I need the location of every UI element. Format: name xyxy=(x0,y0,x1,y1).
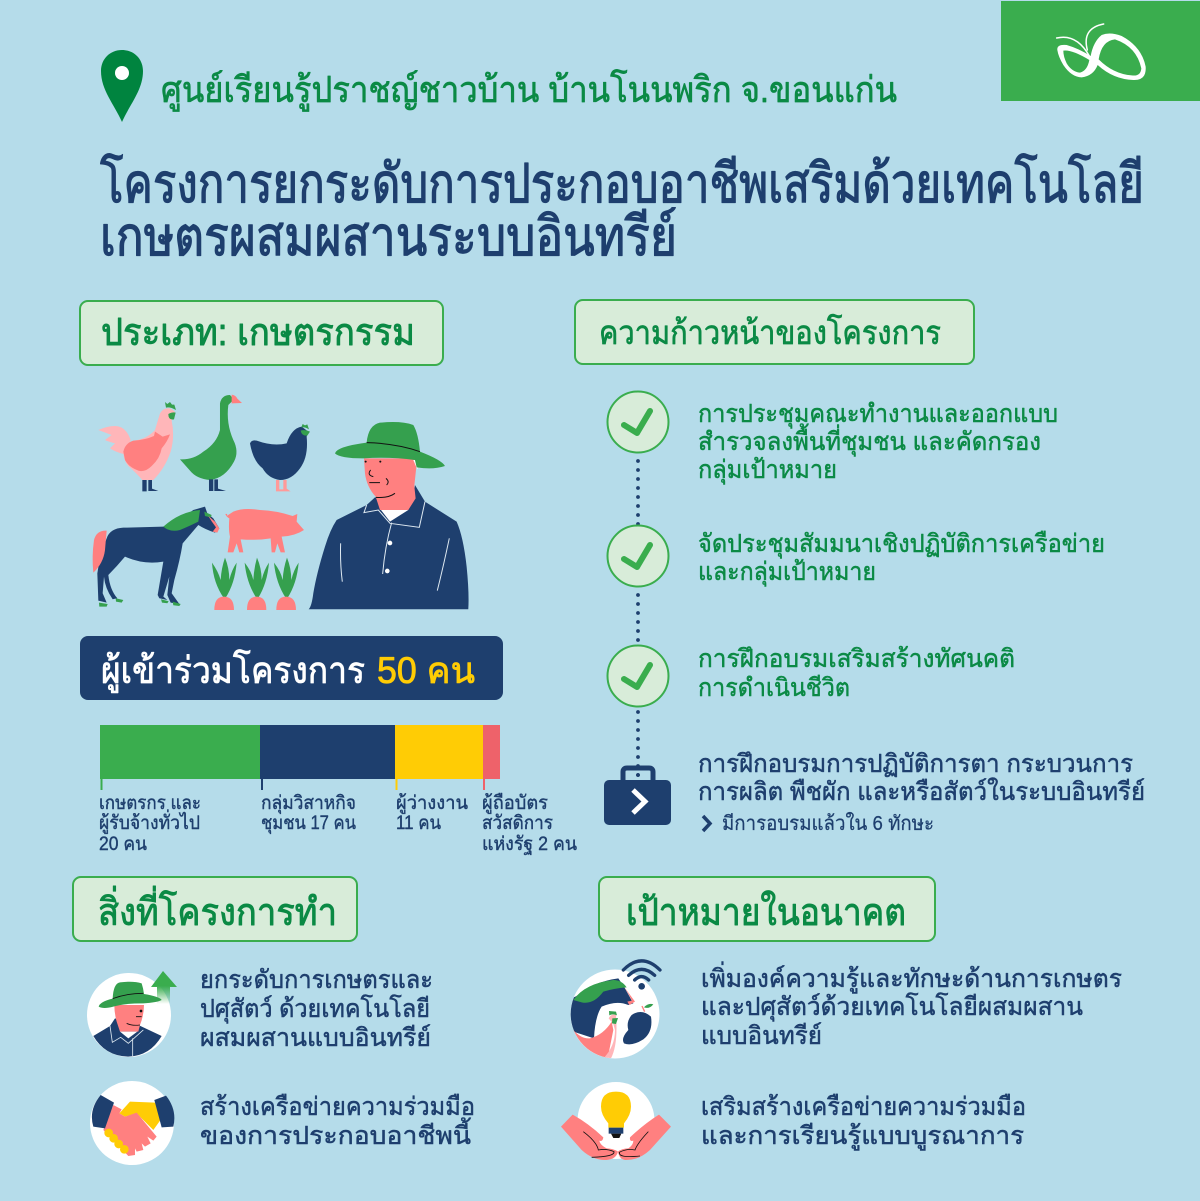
bar labels: ผู้รับจ้างทั่วไป xyxy=(99,809,200,834)
illustration: farm animals and farmer xyxy=(93,395,469,610)
text: activity 1: ยกระดับการเกษตรและ xyxy=(200,966,433,994)
icon: farmer xyxy=(309,422,469,609)
bar labels: 11 คน xyxy=(396,813,441,834)
bar labels: ผู้ว่างงาน xyxy=(396,793,468,814)
bar labels: กลุ่มวิสาหกิจ xyxy=(261,793,356,815)
location heading: ศูนย์เรียนรู้ปราชญ์ชาวบ้าน บ้านโนนพริก จ.ขอนแก่น xyxy=(161,69,897,112)
progress step 3 text: การดำเนินชีวิต xyxy=(698,674,850,702)
text: goal 2: และการเรียนรู้แบบบูรณาการ xyxy=(701,1122,1024,1151)
bar labels: สวัสดิการ xyxy=(482,813,553,834)
text: activity 2 xyxy=(200,1093,475,1150)
progress step 2 text: จัดประชุมสัมมนาเชิงปฏิบัติการเครือข่าย xyxy=(698,530,1105,559)
text: goal 2 xyxy=(701,1093,1026,1151)
progress step 4 text xyxy=(698,750,1145,835)
icon: carrots xyxy=(212,558,299,610)
panel: progress badge xyxy=(575,300,974,364)
stacked bar chart xyxy=(99,725,577,855)
panel: future goals badge xyxy=(599,877,935,941)
text: activity 1: ผสมผสานแบบอินทรีย์ xyxy=(200,1024,431,1052)
bar labels: ชุมชน 17 คน xyxy=(261,813,356,835)
progress step 2 text xyxy=(698,530,1105,587)
text: goal 1: และปศุสัตว์ด้วยเทคโนโลยีผสมผสาน xyxy=(701,992,1083,1022)
progress timeline connectors xyxy=(636,461,640,776)
panel: future goals badge: เป้าหมายในอนาคต xyxy=(626,891,906,934)
panel: progress badge: ความก้าวหน้าของโครงการ xyxy=(599,314,941,351)
text: activity 1: ปศุสัตว์ ด้วยเทคโนโลยี xyxy=(200,994,430,1024)
icon: briefcase xyxy=(604,768,671,825)
icon: check 1 xyxy=(608,392,668,452)
progress step 1 text: การประชุมคณะทำงานและออกแบบ xyxy=(698,400,1058,429)
participants banner: 50 คน xyxy=(377,650,475,691)
text: goal 1: เพิ่มองค์ความรู้และทักษะด้านการเกษตร xyxy=(701,961,1122,994)
bar labels xyxy=(99,793,577,855)
bar labels: ผู้ถือบัตร xyxy=(482,793,548,814)
text: activity 2: ของการประกอบอาชีพนี้ xyxy=(200,1117,471,1150)
logo block xyxy=(1001,1,1200,101)
progress step 3 text xyxy=(698,645,1015,702)
icon: hands with light bulb xyxy=(561,1082,671,1160)
panel: activities badge: สิ่งที่โครงการทำ xyxy=(98,886,337,934)
progress step 4 text: มีการอบรมแล้วใน 6 ทักษะ xyxy=(722,812,934,835)
icon: location pin xyxy=(101,50,143,122)
icon: farm tech circle xyxy=(568,961,660,1060)
icon: pig xyxy=(225,509,304,552)
icon: farmer with up arrow xyxy=(87,971,177,1057)
bar labels: 20 คน xyxy=(99,834,147,855)
progress step 3 text: การฝึกอบรมเสริมสร้างทัศนคติ xyxy=(698,645,1015,673)
participants banner: ผู้เข้าร่วมโครงการ xyxy=(101,649,365,693)
progress step 1 text: กลุ่มเป้าหมาย xyxy=(698,456,837,485)
panel: type badge: ประเภท: เกษตรกรรม xyxy=(101,312,415,354)
progress step 1 text xyxy=(698,400,1058,485)
progress step 4 text: การฝึกอบรมการปฏิบัติการตา กระบวนการ xyxy=(698,750,1133,778)
title xyxy=(100,153,1144,267)
progress step 2 text: และกลุ่มเป้าหมาย xyxy=(698,558,876,587)
title: เกษตรผสมผสานระบบอินทรีย์ xyxy=(100,207,677,267)
participants banner xyxy=(80,636,503,700)
text: activity 2: สร้างเครือข่ายความร่วมมือ xyxy=(200,1093,475,1121)
icon: check 2 xyxy=(608,526,668,586)
text: goal 1 xyxy=(701,961,1122,1050)
text: goal 2: เสริมสร้างเครือข่ายความร่วมมือ xyxy=(701,1093,1026,1121)
icon: goose xyxy=(180,395,242,491)
icon: check 3 xyxy=(608,646,668,706)
progress step 4 text: การผลิต พืชผัก และหรือสัตว์ในระบบอินทรีย์ xyxy=(698,777,1145,806)
text: activity 1 xyxy=(200,966,433,1052)
icon: rooster xyxy=(98,402,176,491)
panel: type badge xyxy=(80,301,443,365)
bar labels: แห่งรัฐ 2 คน xyxy=(482,834,577,855)
icon: handshake xyxy=(90,1081,174,1165)
bar labels: เกษตรกร และ xyxy=(99,793,201,814)
text: goal 1: แบบอินทรีย์ xyxy=(701,1022,822,1050)
icon: hen xyxy=(250,424,310,491)
progress step 1 text: สำรวจลงพื้นที่ชุมชน และคัดกรอง xyxy=(698,423,1041,457)
panel: activities badge xyxy=(73,877,357,941)
icon: horse xyxy=(93,507,219,607)
